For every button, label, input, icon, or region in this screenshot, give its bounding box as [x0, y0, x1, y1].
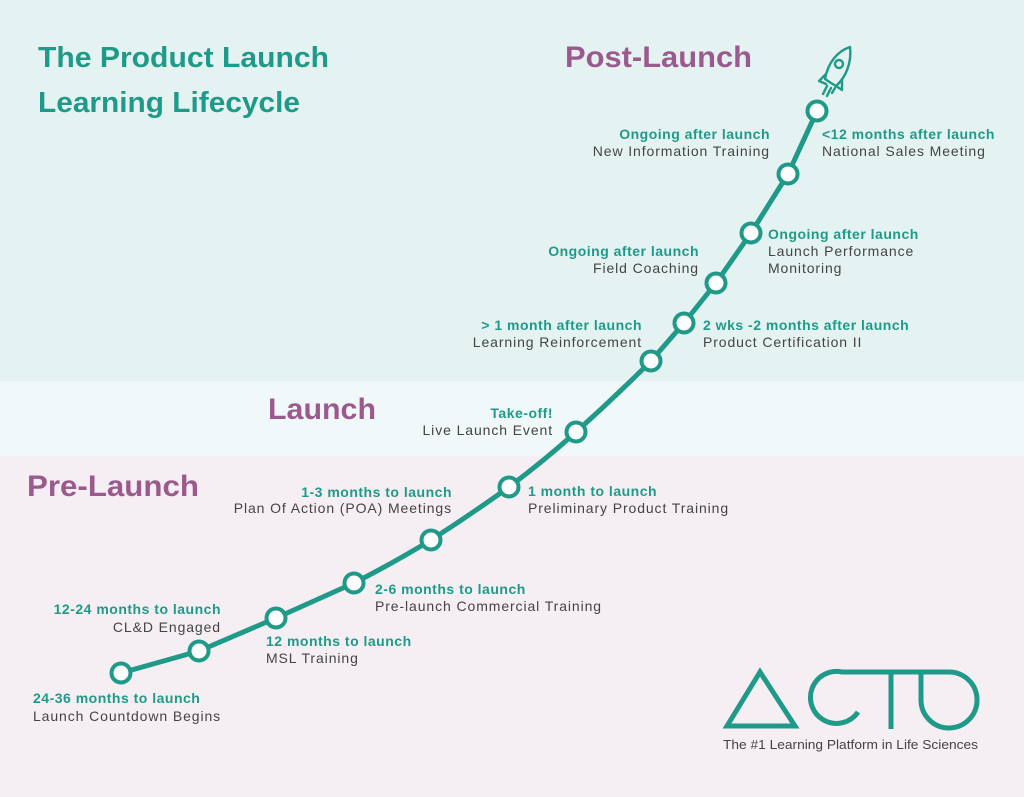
label: 2-6 months: Pre-launch Commercial Training — [375, 598, 602, 614]
label: 12-24 months: CL&D Engaged — [113, 619, 221, 635]
title: Learning Lifecycle — [38, 87, 300, 119]
title: The Product Launch — [38, 42, 329, 74]
logo: ACTO — [723, 671, 978, 752]
label: 1-3 months: Plan Of Action (POA) Meetings — [234, 500, 452, 516]
label: 1 month — [528, 483, 729, 516]
label: 24-36 months: 24-36 months to launch — [33, 690, 200, 706]
label: 1 month: Preliminary Product Training — [528, 500, 729, 516]
label: 24-36 months: Launch Countdown Begins — [33, 708, 221, 724]
label: new information — [593, 126, 770, 159]
heading: Launch: Launch — [268, 393, 376, 426]
label: 1 month: 1 month to launch — [528, 483, 657, 499]
label: >1 month after: > 1 month after launch — [481, 317, 642, 333]
label: 12-24 months: 12-24 months to launch — [54, 601, 221, 617]
timeline curve — [121, 111, 817, 673]
heading: Post-Launch: Post-Launch — [565, 41, 752, 74]
label: launch performance: Ongoing after launch — [768, 226, 919, 242]
label: new information: Ongoing after launch — [619, 126, 770, 142]
label: national sales: National Sales Meeting — [822, 143, 986, 159]
icon: rocket — [819, 47, 850, 96]
label: national sales: <12 months after launch — [822, 126, 995, 142]
label: field coaching: Ongoing after launch — [548, 243, 699, 259]
label: take-off: Live Launch Event — [422, 422, 553, 438]
label: 2-6 months — [375, 581, 602, 614]
label: launch performance: Monitoring — [768, 260, 842, 276]
label: new information: New Information Training — [593, 143, 770, 159]
label: 2-6 months: 2-6 months to launch — [375, 581, 526, 597]
label: 12 months — [266, 633, 412, 666]
logo: ACTO: The #1 Learning Platform in Life Sciences — [723, 738, 978, 752]
label: 24-36 months — [33, 690, 221, 724]
label: field coaching: Field Coaching — [593, 260, 699, 276]
label: 2wks-2 months: Product Certification II — [703, 334, 862, 350]
label: 12-24 months — [54, 601, 221, 635]
label: 12 months: 12 months to launch — [266, 633, 412, 649]
label: take-off — [422, 405, 553, 438]
label: national sales — [822, 126, 995, 159]
label: 2wks-2 months — [703, 317, 909, 350]
label: field coaching — [548, 243, 699, 276]
label: >1 month after: Learning Reinforcement — [473, 334, 642, 350]
label: 2wks-2 months: 2 wks -2 months after launch — [703, 317, 909, 333]
timeline nodes — [112, 102, 826, 682]
label: 12 months: MSL Training — [266, 650, 359, 666]
label: 1-3 months: 1-3 months to launch — [301, 484, 452, 500]
label: launch performance — [768, 226, 919, 276]
label: launch performance: Launch Performance — [768, 243, 914, 259]
label: 1-3 months — [234, 484, 452, 516]
label: >1 month after — [473, 317, 642, 350]
title — [38, 42, 329, 119]
heading: Pre-Launch: Pre-Launch — [27, 470, 199, 503]
label: take-off: Take-off! — [490, 405, 553, 421]
